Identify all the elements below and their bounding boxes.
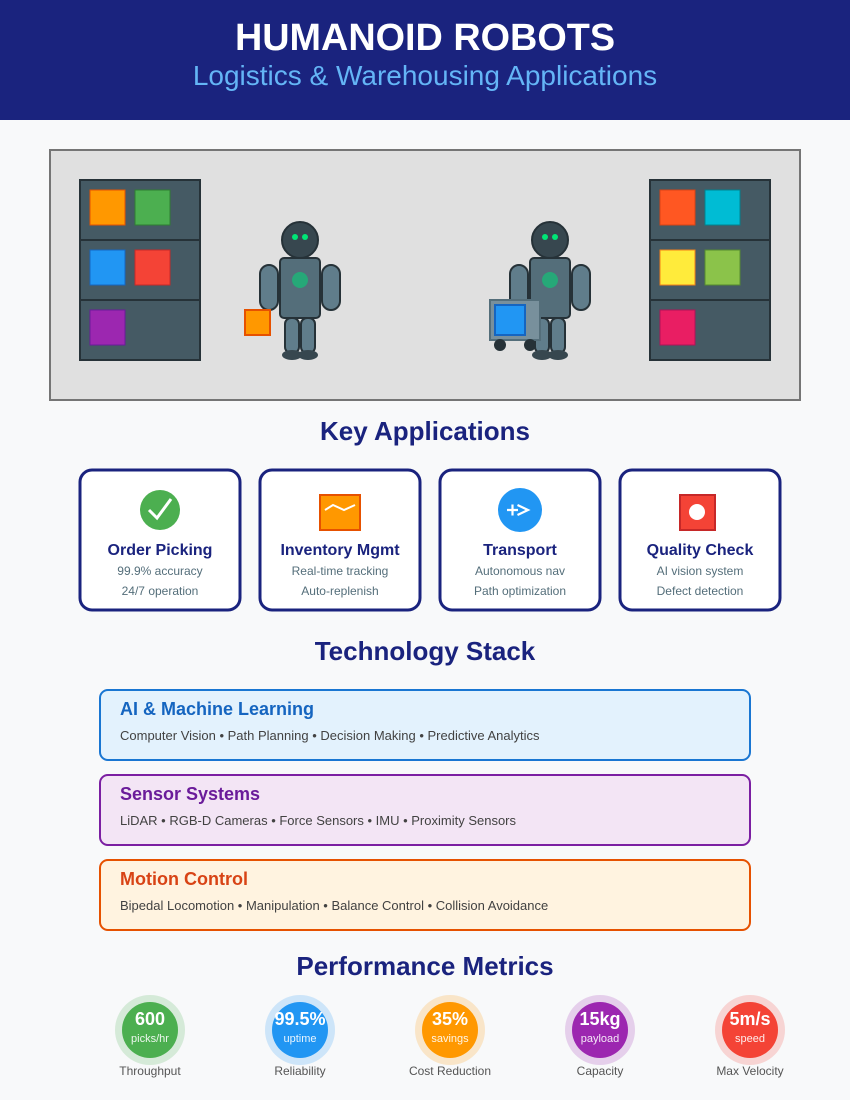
- card: transport: Path optimization: [474, 584, 566, 598]
- card: inventory management: Auto-replenish: [301, 584, 379, 598]
- heading: performance metrics: Performance Metrics: [296, 951, 554, 981]
- metric: reliability: Reliability: [274, 1064, 326, 1078]
- panel: motion control: Bipedal Locomotion • Manipulation • Balance Control • Collision Avoidance: [120, 898, 548, 913]
- metric: capacity: Capacity: [577, 1064, 623, 1078]
- heading: technology stack: Technology Stack: [315, 636, 536, 666]
- metric: max velocity: 5m/s: [729, 1009, 771, 1029]
- subtitle: Logistics & Warehousing Applications: [193, 60, 657, 91]
- panel: AI and machine learning: Computer Vision • Path Planning • Decision Making • Predictive Analytics: [120, 728, 540, 743]
- card: transport: Transport: [483, 542, 558, 559]
- card: quality check: Defect detection: [657, 584, 743, 598]
- right shelf with boxes: [650, 180, 770, 360]
- card: inventory management: Real-time tracking: [292, 564, 388, 578]
- header banner: [0, 0, 850, 120]
- metric: reliability: [265, 995, 335, 1078]
- card: transport: Autonomous nav: [475, 564, 565, 578]
- panel: warehouse scene: [50, 150, 800, 400]
- panel: AI and machine learning: AI & Machine Learning: [120, 699, 314, 719]
- metric: max velocity: Max Velocity: [716, 1064, 784, 1078]
- metric: cost reduction: [409, 995, 491, 1078]
- metric: cost reduction: 35%: [432, 1009, 468, 1029]
- card: transport: [440, 470, 600, 610]
- metric: cost reduction: savings: [431, 1033, 469, 1045]
- card: quality check: AI vision system: [657, 564, 743, 578]
- card: order picking: [80, 470, 240, 610]
- metric: max velocity: [715, 995, 785, 1078]
- panel: sensor systems: Sensor Systems: [120, 784, 260, 804]
- card: quality check: [620, 470, 780, 610]
- title: HUMANOID ROBOTS: [235, 17, 615, 59]
- icon: check mark: [140, 490, 180, 530]
- icon: inventory box: [320, 495, 360, 530]
- icon: transport arrow: [498, 488, 542, 532]
- right robot with cart: [490, 222, 590, 360]
- metric: reliability: 99.5%: [274, 1009, 326, 1029]
- panel: motion control: [100, 860, 750, 930]
- metric: capacity: 15kg: [579, 1009, 621, 1029]
- metric: throughput: Throughput: [119, 1064, 181, 1078]
- card: order picking: Order Picking: [108, 542, 212, 559]
- metric: reliability: uptime: [283, 1033, 317, 1045]
- icon: vision inspection: [680, 495, 715, 530]
- panel: motion control: Motion Control: [120, 869, 248, 889]
- left robot picking box: [245, 222, 340, 360]
- metric: cost reduction: Cost Reduction: [409, 1064, 491, 1078]
- metric: throughput: [115, 995, 185, 1078]
- metric: max velocity: speed: [735, 1033, 765, 1045]
- metric: capacity: [565, 995, 635, 1078]
- panel: sensor systems: [100, 775, 750, 845]
- metric: throughput: 600: [135, 1009, 165, 1029]
- heading: key applications: Key Applications: [320, 416, 530, 446]
- card: inventory management: Inventory Mgmt: [280, 542, 400, 559]
- left shelf with boxes: [80, 180, 200, 360]
- card: order picking: 99.9% accuracy: [117, 564, 203, 578]
- panel: AI and machine learning: [100, 690, 750, 760]
- card: order picking: 24/7 operation: [122, 584, 198, 598]
- card: inventory management: [260, 470, 420, 610]
- card: quality check: Quality Check: [647, 542, 753, 559]
- metric: capacity: payload: [581, 1033, 619, 1045]
- panel: sensor systems: LiDAR • RGB-D Cameras • Force Sensors • IMU • Proximity Sensors: [120, 813, 517, 828]
- metric: throughput: picks/hr: [131, 1033, 169, 1045]
